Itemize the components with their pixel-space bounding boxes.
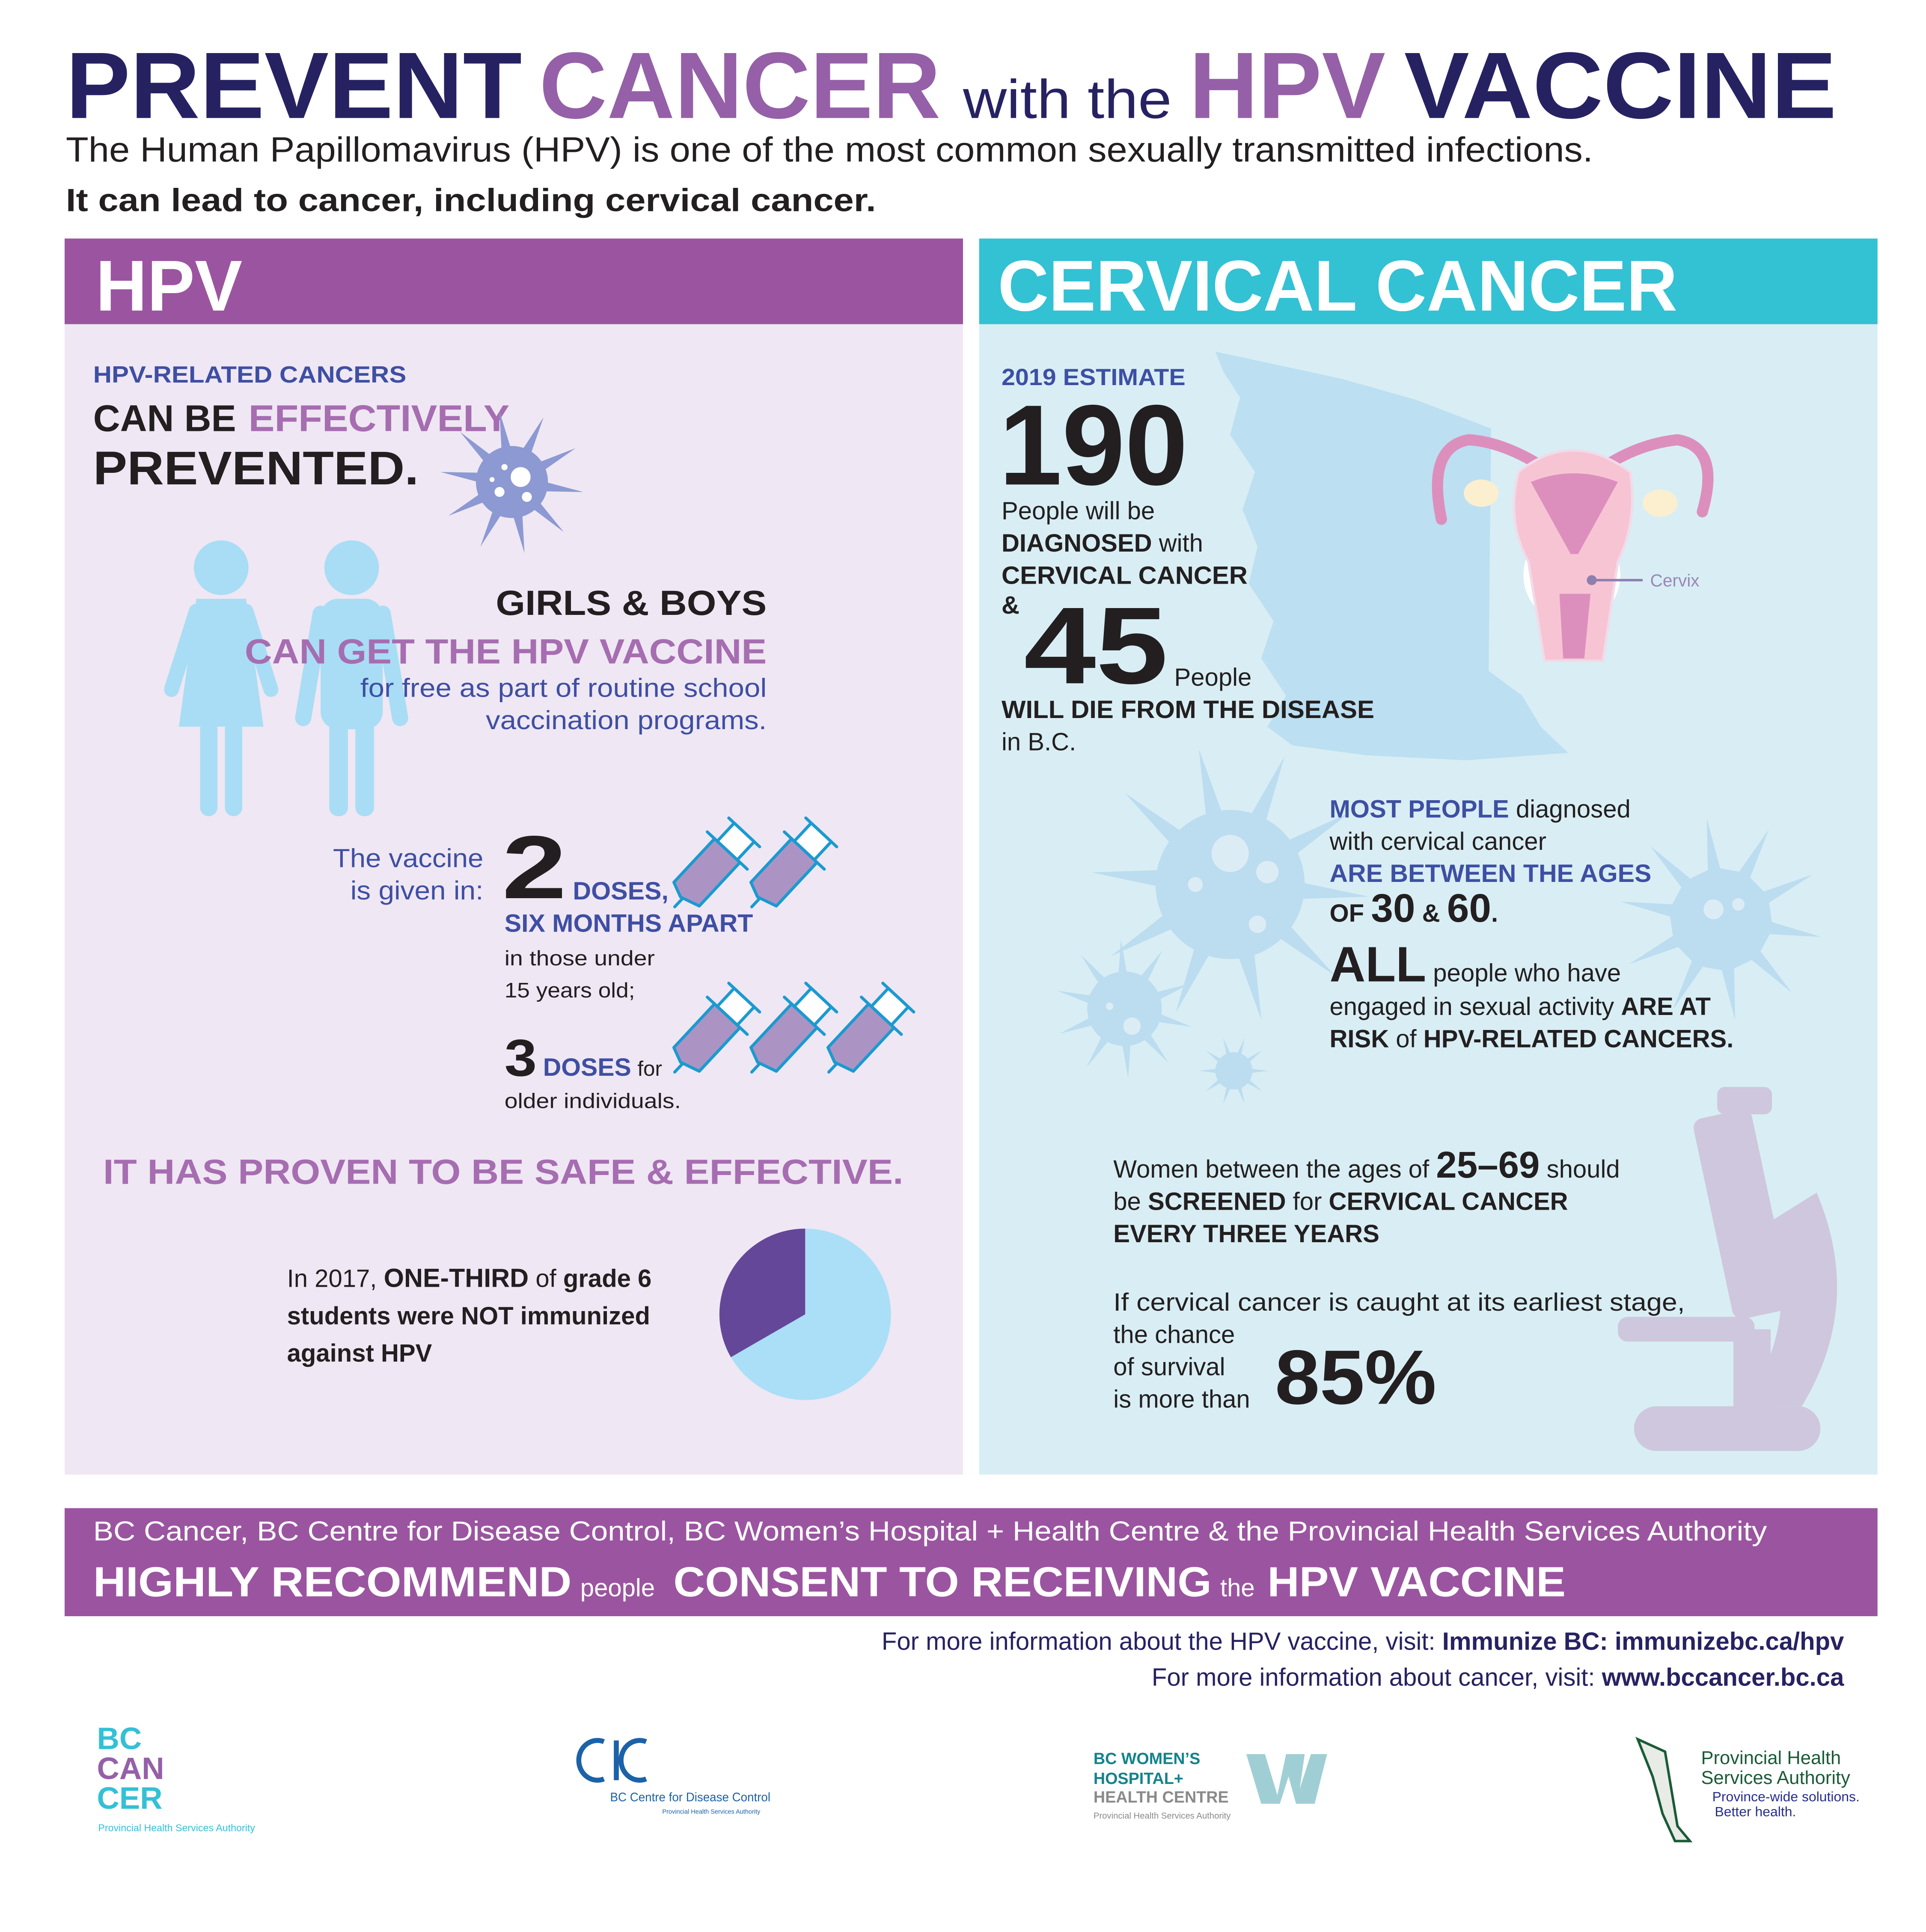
- text: prevented: [93, 361, 509, 495]
- text: girls and boys: for free as part of routine school: [360, 674, 767, 703]
- text: vaccine doses: 15 years old;: [505, 979, 635, 1002]
- subtitle bold line: It can lead to cancer, including cervical cancer.: [66, 182, 876, 218]
- icon: boy: [303, 540, 400, 816]
- text: most people ages: ALL people who have: [1329, 937, 1621, 992]
- logo: BC Cancer: BC: [97, 1721, 142, 1756]
- banner: recommendation: CONSENT TO RECEIVING: [674, 1558, 1212, 1606]
- text: prevented: CAN BE: [93, 398, 236, 439]
- text: most people ages: MOST PEOPLE diagnosed: [1329, 795, 1631, 823]
- panel: HPV: [65, 238, 963, 1475]
- text: vaccine doses: for: [637, 1057, 662, 1080]
- logo: PHSA: Province-wide solutions.: [1712, 1789, 1860, 1804]
- text: one-third stat: In 2017, ONE-THIRD of grade 6: [287, 1264, 651, 1293]
- heading: safe and effective: IT HAS PROVEN TO BE SAFE & EFFECTIVE.: [103, 1153, 904, 1192]
- text: survival 85%: 85%: [1275, 1335, 1436, 1421]
- text: 2019 estimate: People: [1174, 664, 1251, 691]
- panel: cervical cancer: [979, 238, 1878, 1475]
- heading: HPV: HPV: [96, 246, 242, 326]
- banner: recommendation: [65, 1508, 1878, 1616]
- text: screening: [1113, 1144, 1620, 1248]
- banner: recommendation: people: [580, 1574, 655, 1602]
- illustration: uterus: [1438, 440, 1708, 661]
- title: HPV: [1189, 33, 1385, 138]
- text: vaccine doses: DOSES: [543, 1054, 631, 1081]
- banner: recommendation: BC Cancer, BC Centre for Disease Control, BC Women’s Hospital + Health Centre & the Provincial Health Services Authority: [93, 1516, 1767, 1546]
- title: CANCER: [539, 33, 941, 138]
- text: survival 85%: is more than: [1113, 1385, 1250, 1413]
- banner: recommendation: the: [1220, 1574, 1255, 1602]
- text: most people ages: engaged in sexual activity ARE AT: [1329, 993, 1711, 1021]
- text: most people ages: with cervical cancer: [1329, 828, 1546, 855]
- illustration: uterus: Cervix: [1650, 570, 1700, 590]
- pie chart: [719, 1229, 891, 1400]
- text: girls and boys: CAN GET THE HPV VACCINE: [245, 632, 767, 671]
- text: vaccine doses: [333, 818, 753, 1113]
- text: vaccine doses: DOSES,: [573, 877, 669, 905]
- icon: virus: [431, 404, 593, 560]
- logo: PHSA: Better health.: [1715, 1804, 1796, 1819]
- text: more information: For more information about cancer, visit: www.bccancer.bc.ca: [1152, 1664, 1844, 1692]
- text: screening: Women between the ages of 25–69 should: [1113, 1144, 1620, 1186]
- logo: BC Women's: BC WOMEN’S: [1094, 1749, 1200, 1767]
- text: vaccine doses: 2: [502, 818, 567, 917]
- text: survival 85%: of survival: [1113, 1353, 1225, 1381]
- text: more information: [882, 1627, 1844, 1692]
- text: one-third stat: against HPV: [287, 1339, 432, 1367]
- text: most people ages: [1329, 795, 1733, 1053]
- logo: PHSA: Services Authority: [1701, 1768, 1850, 1788]
- text: 2019 estimate: 45: [1024, 585, 1168, 707]
- logo: BCCDC: [579, 1740, 770, 1816]
- title: [66, 33, 1837, 138]
- logo: BCCDC: BC Centre for Disease Control: [610, 1791, 770, 1804]
- text: girls and boys: [245, 584, 767, 735]
- text: most people ages: OF 30 & 60.: [1329, 886, 1498, 930]
- logo: BC Cancer: Provincial Health Services Authority: [98, 1822, 255, 1833]
- icon: microscope: [1618, 1087, 1837, 1451]
- text: prevented: HPV-RELATED CANCERS: [93, 361, 406, 388]
- logo: BC Women's: HOSPITAL+: [1094, 1769, 1183, 1787]
- text: 2019 estimate: &: [1002, 591, 1019, 619]
- banner: recommendation: HIGHLY RECOMMEND: [93, 1558, 571, 1606]
- title: VACCINE: [1404, 33, 1837, 138]
- icons: viruses: [1040, 741, 1838, 1104]
- logo: PHSA: Provincial Health: [1701, 1748, 1841, 1768]
- logo: BCCDC: Provincial Health Services Authority: [662, 1809, 761, 1816]
- text: survival 85%: [1113, 1288, 1685, 1421]
- text: 2019 estimate: CERVICAL CANCER: [1002, 561, 1248, 589]
- text: vaccine doses: 3: [505, 1029, 537, 1087]
- text: vaccine doses: SIX MONTHS APART: [505, 909, 753, 937]
- logo: BC Women's: [1094, 1749, 1327, 1821]
- text: vaccine doses: is given in:: [351, 876, 483, 905]
- text: 2019 estimate: 190: [999, 381, 1188, 509]
- text: one-third stat: students were NOT immunized: [287, 1302, 650, 1330]
- text: screening: be SCREENED for CERVICAL CANCER: [1113, 1188, 1568, 1216]
- text: vaccine doses: older individuals.: [505, 1089, 681, 1113]
- text: vaccine doses: in those under: [505, 947, 655, 970]
- text: prevented: EFFECTIVELY: [249, 398, 509, 439]
- text: 2019 estimate: WILL DIE FROM THE DISEASE: [1002, 696, 1374, 724]
- text: 2019 estimate: in B.C.: [1002, 728, 1076, 756]
- banner: recommendation: HPV VACCINE: [1267, 1558, 1566, 1606]
- heading: cervical cancer: CERVICAL CANCER: [998, 246, 1677, 326]
- logo: PHSA: [1638, 1739, 1860, 1841]
- icon: girl: [172, 540, 271, 816]
- text: 2019 estimate: [999, 364, 1374, 756]
- logo: BC Women's: HEALTH CENTRE: [1094, 1788, 1229, 1806]
- logo: BC Cancer: CER: [97, 1781, 163, 1816]
- icons: syringes: [655, 814, 918, 1091]
- logo: BC Cancer: [97, 1721, 255, 1833]
- text: prevented: PREVENTED.: [93, 442, 419, 495]
- text: girls and boys: vaccination programs.: [486, 706, 767, 735]
- title: with the: [963, 69, 1172, 130]
- text: survival 85%: the chance: [1113, 1321, 1235, 1348]
- text: survival 85%: If cervical cancer is caught at its earliest stage,: [1113, 1288, 1685, 1316]
- text: 2019 estimate: DIAGNOSED with: [1002, 529, 1203, 557]
- text: vaccine doses: The vaccine: [333, 843, 483, 873]
- text: most people ages: ARE BETWEEN THE AGES: [1329, 860, 1651, 887]
- text: more information: For more information about the HPV vaccine, visit: Immunize BC: immunizebc.ca/hpv: [882, 1627, 1844, 1655]
- text: one-third stat: [287, 1264, 651, 1367]
- text: 2019 estimate: 2019 ESTIMATE: [1002, 364, 1186, 390]
- text: girls and boys: GIRLS & BOYS: [496, 584, 767, 623]
- title: PREVENT: [66, 33, 522, 138]
- logo: BC Cancer: CAN: [97, 1751, 164, 1786]
- map: BC: [1215, 352, 1568, 760]
- subtitle: The Human Papillomavirus (HPV) is one of the most common sexually transmitted infections.: [66, 130, 1593, 169]
- logo: BC Women's: Provincial Health Services Authority: [1094, 1811, 1231, 1821]
- text: screening: EVERY THREE YEARS: [1113, 1220, 1379, 1248]
- text: 2019 estimate: People will be: [1002, 497, 1155, 525]
- text: most people ages: RISK of HPV-RELATED CANCERS.: [1329, 1025, 1733, 1053]
